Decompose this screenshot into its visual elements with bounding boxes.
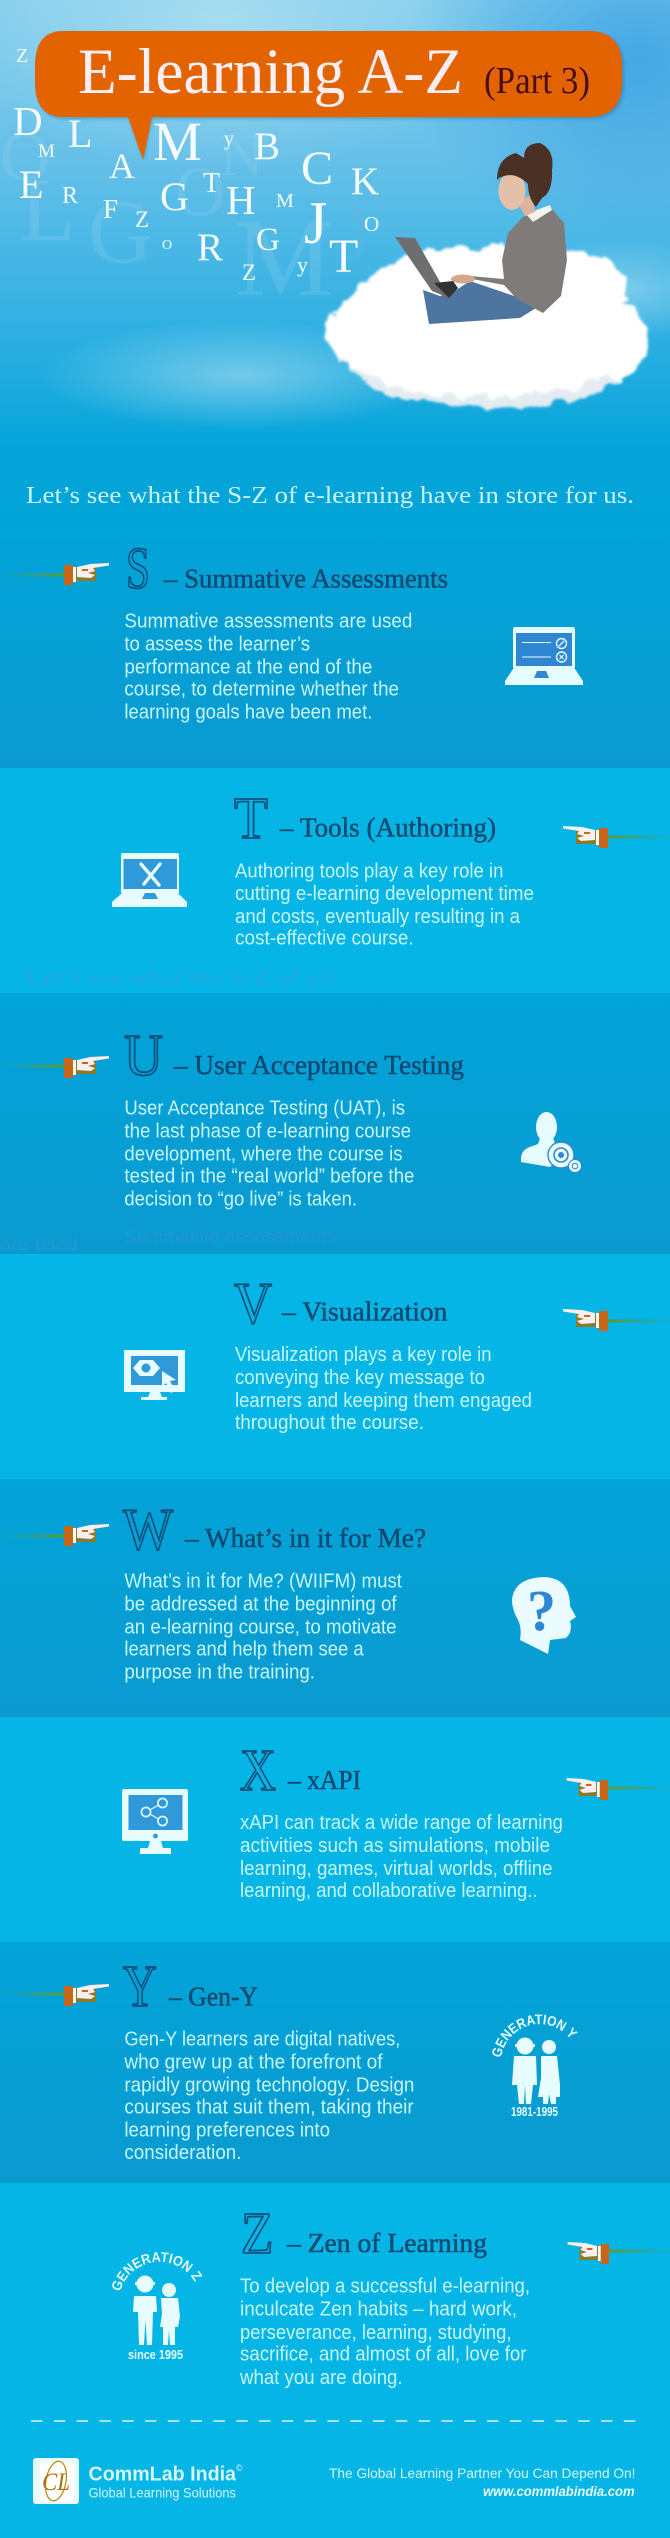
flying letters: M: [153, 111, 202, 172]
pointer line: [0, 1534, 64, 1538]
icon: generation Z: [112, 2252, 202, 2362]
panel: U User Acceptance Testing: [0, 993, 670, 1254]
flying letters: H: [226, 177, 256, 223]
company tagline: Global Learning Solutions: [88, 2484, 236, 2500]
body text: learners and keeping them engaged: [235, 1390, 532, 1412]
icon: generation Y: [492, 2014, 578, 2119]
body text: Visualization plays a key role in: [235, 1344, 492, 1366]
title: E-learning A-Z: [78, 36, 463, 108]
panel: X xAPI: [0, 1717, 670, 1942]
body text: Authoring tools play a key role in: [235, 860, 503, 882]
panel: W What's in it for Me: [0, 1479, 670, 1717]
flying letters: E: [19, 162, 43, 207]
body text: User Acceptance Testing (UAT), is: [124, 1097, 405, 1119]
body text: [239, 2275, 530, 2389]
body text: learning, and collaborative learning..: [240, 1880, 538, 1902]
flying letters: O: [364, 212, 379, 236]
flying letters: L: [68, 111, 92, 156]
faint artefact text: Summative assessments: [124, 1227, 336, 1246]
flying letters: A: [109, 146, 135, 186]
icon: generation Z: GENERATION Z: [112, 2252, 202, 2290]
heading: – Tools (Authoring): [279, 812, 496, 843]
icon: monitor with share: [122, 1789, 188, 1854]
body text: an e-learning course, to motivate: [124, 1616, 397, 1638]
pointing hand: [568, 2242, 609, 2264]
body text: Gen-Y learners are digital natives,: [124, 2029, 400, 2051]
flying letters: B: [254, 125, 280, 168]
sky cloud haze: [40, 320, 440, 430]
letter T: T: [234, 785, 268, 851]
heading: – What’s in it for Me?: [184, 1522, 426, 1553]
footer: [33, 2458, 636, 2504]
body text: courses that suit them, taking their: [124, 2096, 414, 2118]
body text: be addressed at the beginning of: [124, 1594, 397, 1616]
sky background: [0, 0, 670, 530]
icon: head with question mark: ?: [527, 1578, 556, 1643]
panel: T Tools (Authoring): [0, 768, 670, 993]
pointer line: [606, 1786, 670, 1790]
body text: what you are doing.: [239, 2367, 403, 2389]
heading: – Zen of Learning: [286, 2227, 487, 2258]
icon: monitor with eye: [124, 1350, 185, 1400]
body text: learning goals have been met.: [124, 702, 372, 724]
registered mark: ©: [236, 2463, 243, 2473]
pointer line: [607, 2250, 670, 2252]
flying letters: y: [297, 252, 308, 277]
band: [0, 993, 670, 1254]
body text: and costs, eventually resulting in a: [235, 906, 521, 928]
body text: performance at the end of the: [124, 656, 372, 678]
icon: person with gears: [521, 1112, 582, 1172]
panel: Y Gen-Y: [0, 1942, 670, 2183]
logo mark: [33, 2458, 79, 2504]
body text: [235, 860, 534, 950]
letter V: V: [234, 1270, 272, 1336]
letter X: X: [240, 1737, 276, 1803]
flying letters: R: [197, 226, 223, 269]
heading: – Summative Assessments: [163, 562, 448, 594]
faint artefact text: are used: [0, 1235, 78, 1254]
letter Y: Y: [123, 1953, 157, 2019]
hair: [497, 143, 552, 207]
body text: sacrifice, and almost of all, love for: [240, 2344, 527, 2366]
body text: cutting e-learning development time: [235, 883, 534, 905]
sky light patch top: [0, 0, 520, 170]
faint artefact text: [0, 1227, 336, 1254]
body text: tested in the “real world” before the: [124, 1165, 414, 1187]
band: [0, 1254, 670, 1479]
faint artefact text: Let’s see what the S-Z of e-l: [27, 965, 335, 990]
body text: cost-effective course.: [235, 928, 414, 950]
pointer line: [606, 1320, 670, 1322]
body text: [124, 610, 412, 724]
heading: – User Acceptance Testing: [173, 1049, 464, 1080]
logo mark: CL: [42, 2469, 70, 2496]
heading: – xAPI: [287, 1764, 361, 1795]
body text: [235, 1344, 532, 1434]
body text: Summative assessments are used: [124, 610, 412, 632]
letter W: W: [123, 1496, 173, 1562]
icon: laptop with tools: [112, 853, 187, 907]
sky cloud haze right: [500, 240, 670, 340]
band: [0, 1942, 670, 2183]
slogan: The Global Learning Partner You Can Depend On!: [329, 2465, 636, 2481]
body text: To develop a successful e-learning,: [240, 2275, 530, 2297]
pointer line: [0, 574, 64, 576]
cloud: [327, 246, 647, 408]
company name: CommLab India: [88, 2464, 237, 2486]
flying letters: J: [304, 190, 327, 256]
band: [0, 1479, 670, 1717]
flying letters: F: [103, 194, 118, 224]
title speech bubble: [35, 31, 624, 160]
faded letters: J: [340, 190, 371, 278]
pointing hand: [64, 1056, 109, 1078]
panel: hero: [0, 0, 670, 530]
pointing hand: [567, 1778, 608, 1800]
flying letters: T: [203, 168, 220, 199]
pointing hand: [64, 563, 109, 585]
flying letters: R: [62, 183, 78, 209]
flying letters: K: [351, 160, 379, 203]
body text: learning, games, virtual worlds, offline: [240, 1858, 553, 1880]
panel: Z Zen of Learning: [112, 2200, 670, 2389]
intro sentence: Let’s see what the S-Z of e-learning have in store for us.: [26, 483, 634, 509]
body text: inculcate Zen habits – hard work,: [240, 2299, 517, 2321]
neck: [516, 195, 535, 216]
flying letters: [13, 45, 379, 285]
pointer line: [606, 836, 670, 838]
flying letters: y: [224, 128, 234, 150]
body text: [123, 2029, 414, 2164]
flying letters: T: [329, 230, 358, 283]
website: www.commlabindia.com: [483, 2483, 635, 2499]
body text: perseverance, learning, studying,: [240, 2322, 512, 2344]
icon: generation Z: since 1995: [128, 2347, 183, 2362]
band: [0, 768, 670, 993]
icon: head with question mark: [512, 1577, 576, 1654]
sky deep patch right: [410, 0, 670, 250]
heading: – Gen-Y: [168, 1980, 258, 2012]
flying letters: G: [160, 174, 189, 219]
jeans: [423, 281, 536, 324]
faded letters: M: [235, 197, 333, 319]
flying letters: M: [38, 141, 55, 162]
flying letters: M: [276, 190, 294, 212]
collar: [526, 205, 552, 222]
panel: V Visualization: [0, 1254, 670, 1479]
letter Z: Z: [241, 2200, 274, 2266]
body text: learning preferences into: [124, 2119, 330, 2141]
body text: consideration.: [124, 2142, 242, 2164]
band: [0, 2183, 670, 2538]
body text: throughout the course.: [235, 1412, 424, 1434]
body text: conveying the key message to: [235, 1367, 485, 1389]
body text: [124, 1570, 402, 1684]
body text: course, to determine whether the: [124, 679, 399, 701]
body text: who grew up at the forefront of: [123, 2052, 383, 2074]
body text: xAPI can track a wide range of learning: [240, 1812, 563, 1834]
body text: the last phase of e-learning course: [124, 1120, 411, 1142]
icon: generation Y: GENERATION Y: [492, 2014, 578, 2057]
faded letters: O: [175, 154, 226, 231]
pointer line: [0, 1992, 64, 1996]
faded letters: L: [20, 161, 75, 260]
flying letters: G: [256, 222, 280, 258]
sweater: [470, 208, 567, 313]
band: [0, 1717, 670, 1942]
body text: learners and help them see a: [124, 1639, 365, 1661]
pointer line: [0, 1064, 64, 1068]
flying letters: C: [301, 142, 333, 195]
body text: What’s in it for Me? (WIIFM) must: [124, 1570, 402, 1592]
body text: decision to “go live” is taken.: [124, 1188, 357, 1210]
body text: development, where the course is: [124, 1143, 403, 1165]
faded letters: O: [0, 119, 51, 196]
pointing hand: [64, 1524, 109, 1546]
body text: to assess the learner’s: [124, 634, 310, 656]
flying letters: Z: [242, 260, 256, 285]
body text: [240, 1812, 563, 1902]
pointing hand: [563, 1309, 608, 1331]
body text: rapidly growing technology. Design: [124, 2075, 414, 2097]
body text: activities such as simulations, mobile: [240, 1835, 550, 1857]
title part number: (Part 3): [484, 60, 590, 102]
face: [498, 172, 526, 210]
panel: S Summative Assessments: [0, 530, 670, 768]
faded letters: [0, 119, 371, 319]
flying letters: D: [13, 98, 43, 144]
faded letters: G: [88, 183, 153, 282]
icon: laptop with checklist: [505, 627, 583, 685]
band: [0, 530, 670, 768]
flying letters: O: [162, 238, 172, 253]
heading: – Visualization: [281, 1296, 448, 1327]
woman with laptop: [395, 143, 567, 324]
letter U: U: [124, 1022, 163, 1088]
icon: generation Y: 1981-1995: [511, 2104, 558, 2119]
hand on keyboard: [451, 274, 475, 284]
body text: [124, 1097, 414, 1210]
pointing hand: [563, 826, 608, 848]
flying letters: Z: [16, 45, 28, 67]
body text: purpose in the training.: [124, 1662, 315, 1684]
laptop: [395, 237, 449, 298]
faded letters: N: [220, 122, 263, 188]
pointing hand: [64, 1984, 109, 2006]
flying letters: Z: [135, 207, 149, 232]
letter S: S: [126, 535, 150, 601]
